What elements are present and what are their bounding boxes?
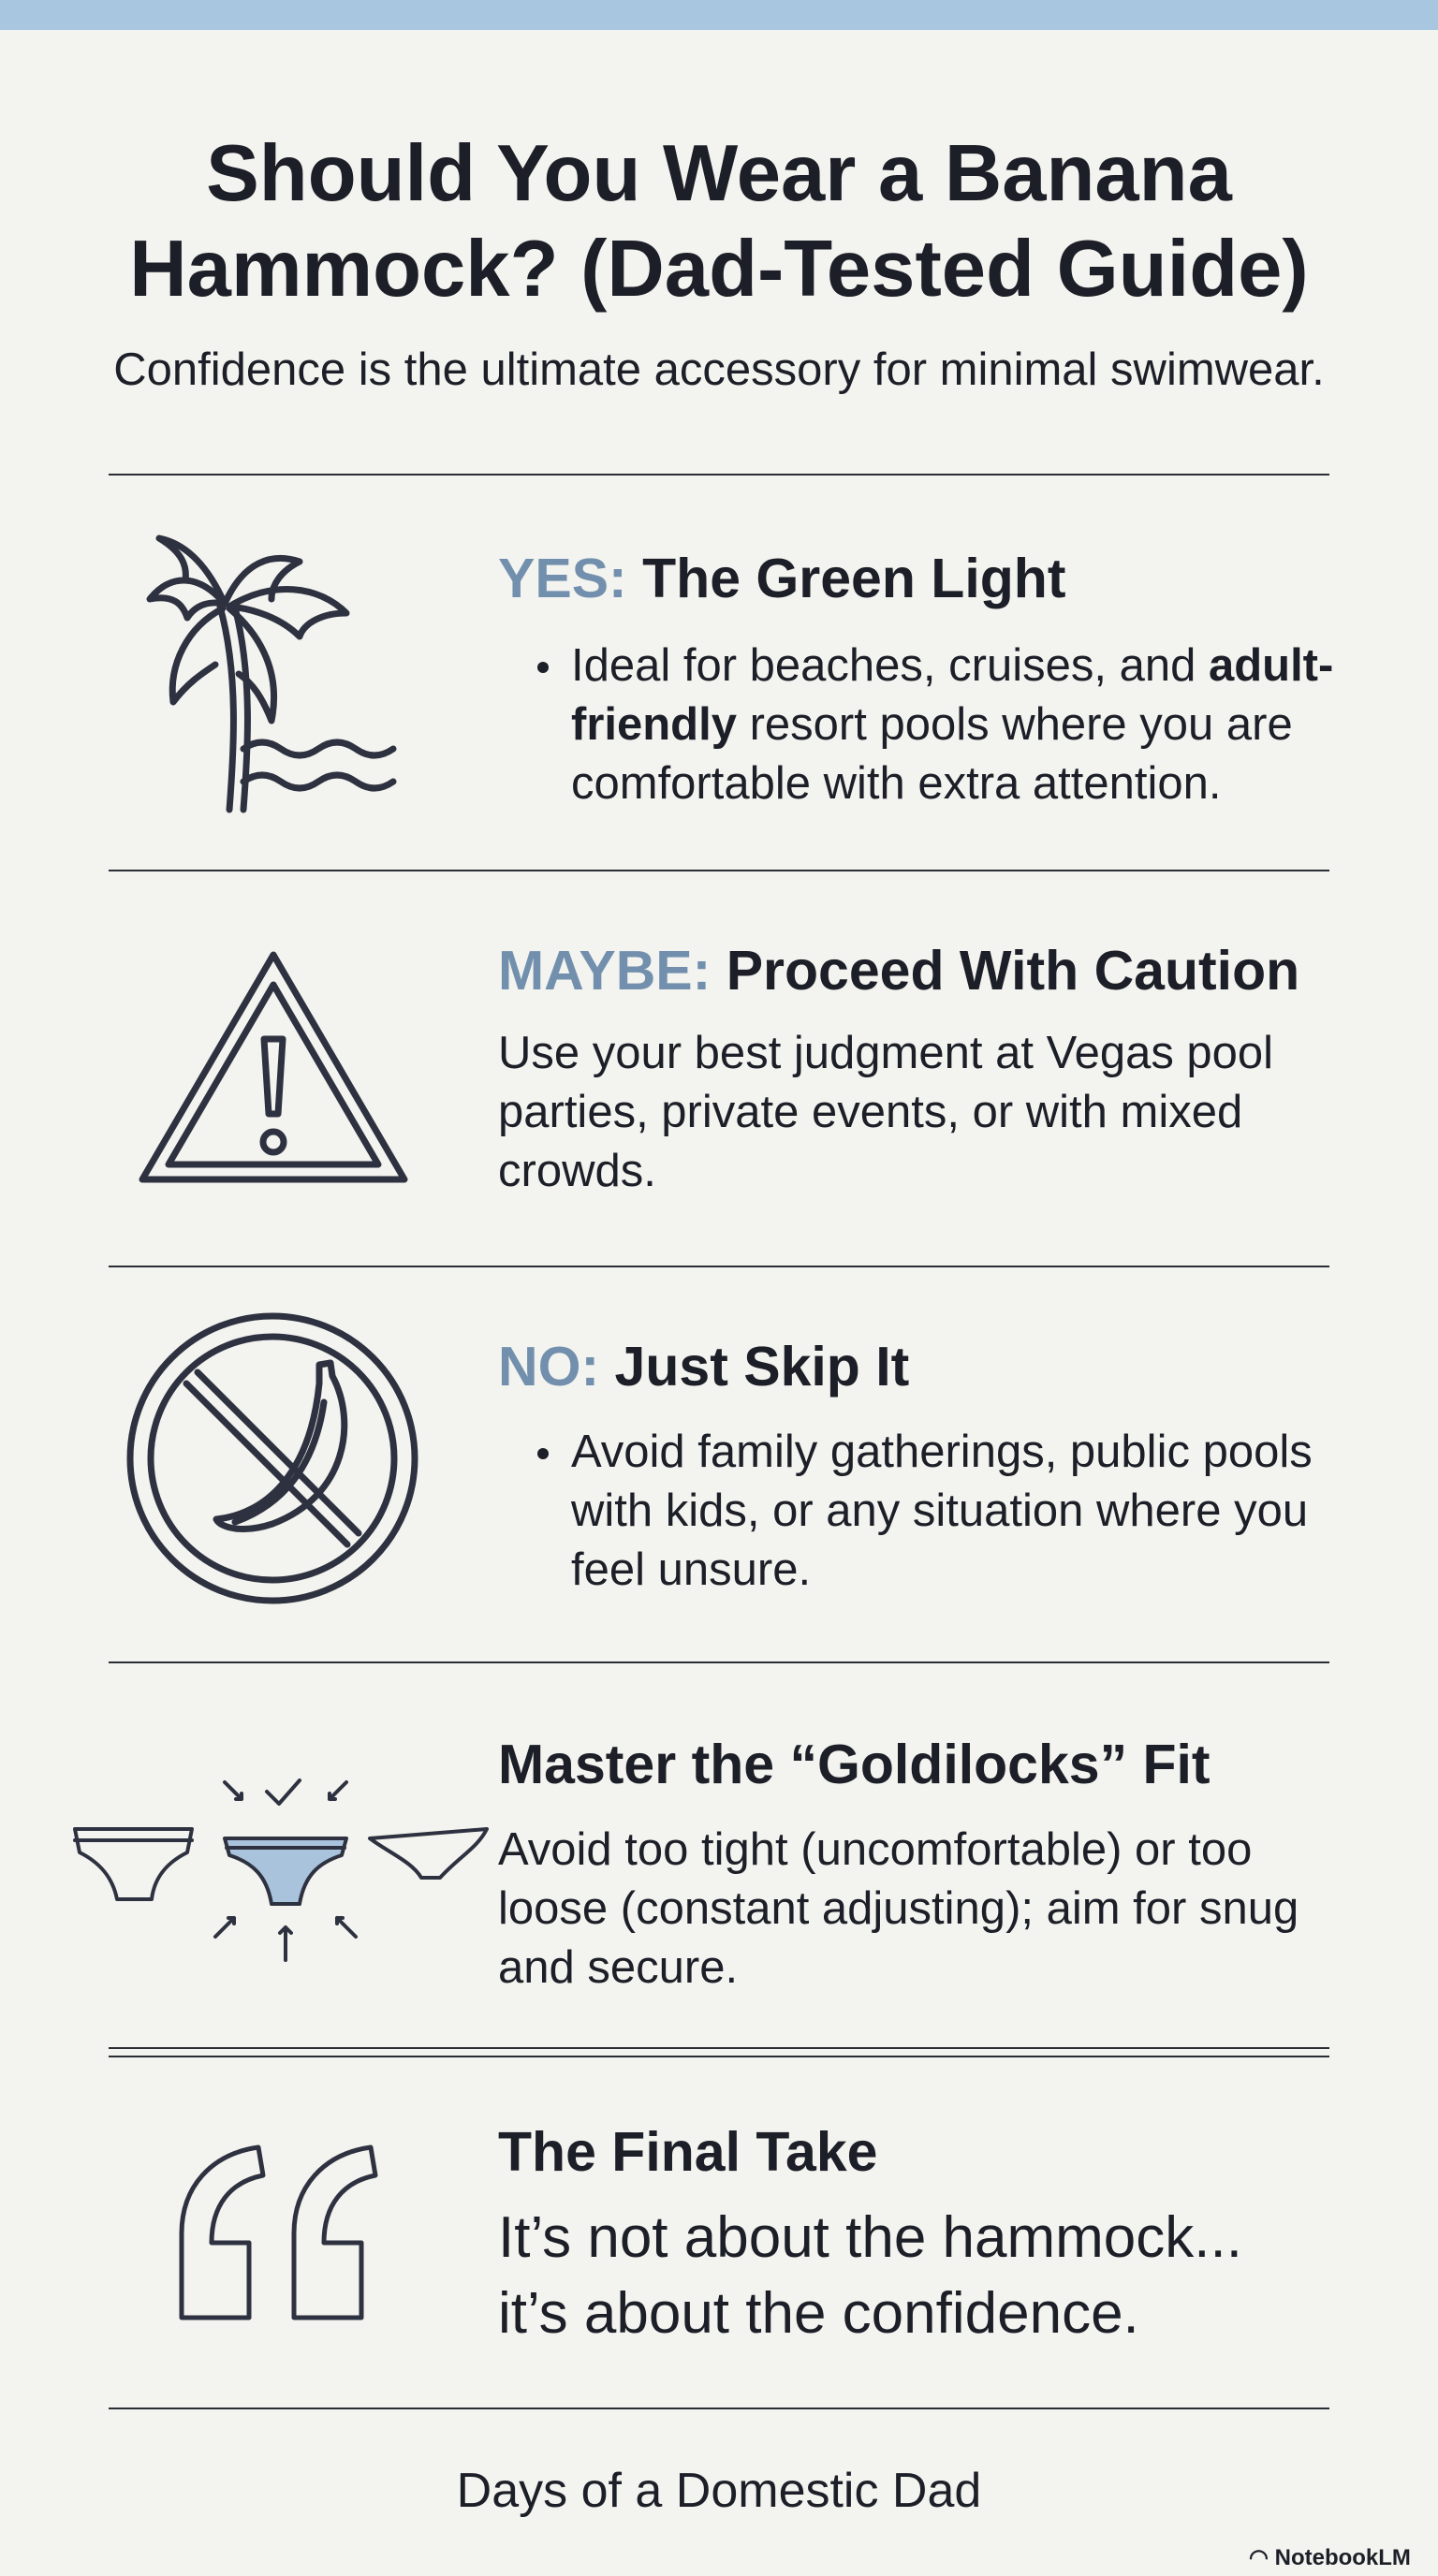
subtitle: Confidence is the ultimate accessory for minimal swimwear. [113,344,1325,395]
bullet text [498,637,1397,813]
bullet text: friendly resort pools where you are [571,699,1293,750]
panel: yes [146,535,1333,812]
bullet text: Ideal for beaches, cruises, and adult- [571,640,1333,691]
bullet text: Avoid family gatherings, public pools with kids, or any situation where you feel unsure. [571,1427,1313,1595]
icon: briefs comparison [73,1778,489,1962]
icon: quote marks [180,2145,378,2320]
heading: The Final Take [498,2121,877,2183]
notebooklm badge: ◠ NotebookLM [1249,2545,1411,2570]
icon: palm tree [146,535,397,812]
panel: goldilocks fit [73,1734,1299,1993]
icon: warning triangle [139,951,408,1183]
bullet text: comfortable with extra attention. [571,758,1222,809]
text: Avoid too tight (uncomfortable) or too loose (constant adjusting); aim for snug and secure. [498,1824,1299,1993]
top bar [0,0,1438,30]
title: Should You Wear a Banana [206,129,1232,218]
heading: MAYBE: Proceed With Caution [498,940,1299,1002]
footer: Days of a Domestic Dad [457,2464,981,2518]
title [129,129,1309,314]
title: Hammock? (Dad-Tested Guide) [129,225,1309,314]
quote text [498,2205,1242,2346]
quote text: it’s about the confidence. [498,2281,1139,2346]
icon: no banana [127,1312,418,1604]
text: Use your best judgment at Vegas pool parties, private events, or with mixed crowds. [498,1028,1273,1196]
panel: no [127,1312,1313,1604]
heading: Master the “Goldilocks” Fit [498,1734,1211,1795]
panel: final take [180,2121,1242,2346]
quote text: It’s not about the hammock... [498,2205,1242,2270]
panel: maybe [139,940,1299,1196]
heading: NO: Just Skip It [498,1336,909,1398]
heading: YES: The Green Light [498,548,1065,609]
